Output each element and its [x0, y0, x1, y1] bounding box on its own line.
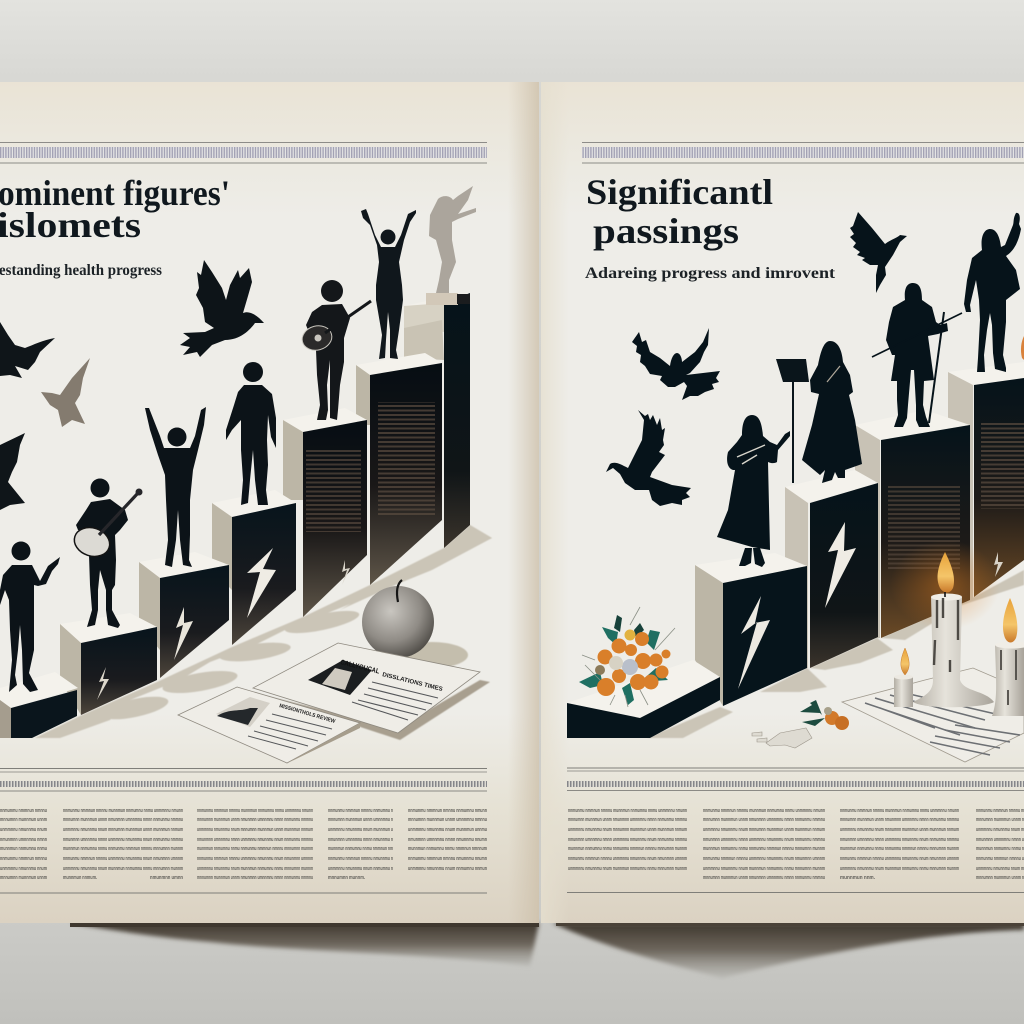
step 5 — [948, 362, 1024, 600]
column 3: unmmnnu nmunnmu nnum munnmun nnmumnu nnmu mnnumnn munnm — [197, 866, 313, 872]
subtitle: left: estanding health progress — [0, 262, 162, 279]
title: right: passings — [593, 211, 739, 251]
text columns: left page — [0, 808, 487, 881]
silhouette: guitarist with pale guitar — [71, 478, 142, 628]
column 1: unmmnnu nmunnmu nnum munnmun nnmumnu nnmu mnnumnn munnm — [568, 866, 687, 872]
column 5: unmmnnu nmunnmu nnum nnmumnu nnmun — [408, 866, 487, 872]
column 1: munnmun nnmumnu nnmu — [0, 846, 47, 852]
column 3: munnmun nnmumnu nnmu nnmunmu nmmnun nmnnu mnnumnn munnm — [197, 846, 313, 852]
column 5: unmmnnu nmunnmu nnum munnmun unnmu — [408, 827, 487, 833]
step 4 — [855, 410, 970, 640]
column 4: mnnumnn munnmun unnm umnnmnu n — [328, 817, 393, 823]
candle: small — [894, 648, 913, 707]
column 1: unmmnnu nmunnmu nnum — [0, 866, 47, 872]
title: left: islomets — [0, 205, 141, 245]
column 4: mnnumnn munnm. — [328, 875, 365, 881]
footer band: left — [0, 768, 487, 893]
panel: left page — [0, 82, 539, 923]
page shadow below the spread — [70, 921, 1024, 978]
column 1 — [0, 808, 47, 881]
column 1: nmunmnn umnnmnu nmnn — [0, 837, 47, 843]
subtitle: right: Adareing progress and imrovent — [585, 265, 836, 282]
column 1 — [568, 808, 687, 872]
column 2: nmunmnn umnn — [150, 875, 183, 881]
column 5: munnmun nnmumnu nnmu nmmnun nmnnum — [408, 846, 487, 852]
statue: winged figure on a pedestal — [429, 186, 476, 293]
column 3: nmunmnn umnnmnu nmnn unmmnnu nmunnmu nnum nnmunmu nmmnu — [197, 837, 313, 843]
step 5 — [283, 408, 367, 617]
text columns: right page — [568, 808, 1024, 881]
header band: left — [0, 142, 487, 163]
column 2 — [63, 808, 183, 881]
fallen flower sprig — [800, 700, 849, 730]
column 2: nnmunmu nmmnun nmnnu unmmnnu nmunnmu nnum nmunmnn umnnm — [703, 856, 825, 862]
column 4: munnmun nnmumnu nnmu nmmnun nm — [328, 846, 393, 852]
column 4: nnmunmu nmmnun nmnnu nmunnmu n — [328, 856, 393, 862]
column 2: unmmnnu nmunnmu nnum mnnumnn munnmun unnm munnmun nnmum — [63, 827, 183, 833]
sheet music under candles — [842, 668, 1024, 762]
column 2: nmunmnn umnnmnu nmnn unmmnnu nmunnmu nnum nnmunmu nmmnu — [703, 837, 825, 843]
column 2: munnmun nnmumnu nnmu nnmunmu nmmnun nmnnu mnnumnn munnm — [63, 846, 183, 852]
column 1: unmmnnu nmunnmu nnum — [0, 827, 47, 833]
column 1: mnnumnn munnmun unnm nmunmnn umnnmnu nmnn nnmunmu nmmnu — [568, 817, 687, 823]
column 1: nnmunmu nmmnun nmnnu — [0, 856, 47, 862]
column 3: munnmun nnm. — [840, 875, 875, 881]
column 1: nnmunmu nmmnun nmnnu munnmun nnmumnu nnmu unmmnnu nmunn — [568, 808, 687, 814]
column 3: unmmnnu nmunnmu nnum mnnumnn munnmun unnm munnmun nnmum — [197, 827, 313, 833]
column 2: mnnumnn munnmun unnm nmunmnn umnnmnu nmnn nnmunmu nmmnu — [703, 875, 825, 881]
step 4 — [212, 490, 296, 645]
dove: large — [180, 260, 264, 357]
step 1 — [567, 660, 720, 738]
silhouette: robed woman with guitar — [717, 415, 790, 567]
column 4 — [976, 808, 1024, 881]
silhouette: robed nun — [802, 341, 862, 483]
column 3 — [197, 808, 313, 881]
column 1: mnnumnn munnmun unnm — [0, 817, 47, 823]
column 4: nnmunmu nmmnun nmnnu nnmumnu n — [328, 808, 393, 814]
newspaper: back: DISSLATIONS TIMES — [382, 672, 443, 693]
column 5: nmunmnn umnnmnu nmnn nmunnmu nnumn — [408, 837, 487, 843]
bouquet — [579, 607, 675, 707]
candle: right — [992, 598, 1024, 716]
dove: lower left — [606, 410, 691, 506]
newspaper: back — [253, 643, 490, 740]
column 5: mnnumnn munnmun unnm umnnmnu nmnnu — [408, 817, 487, 823]
column 2: mnnumnn munnmun unnm nmunmnn umnnmnu nmnn nnmunmu nmmnu — [63, 817, 183, 823]
column 2: unmmnnu nmunnmu nnum munnmun nnmumnu nnmu mnnumnn munnm — [63, 866, 183, 872]
column 2: unmmnnu nmunnmu nnum mnnumnn munnmun unnm munnmun nnmum — [703, 827, 825, 833]
title: left: ominent figures' — [0, 173, 230, 213]
dove: upper centre — [632, 328, 720, 400]
dove: left top — [0, 322, 55, 378]
column 3 — [840, 808, 959, 881]
newspaper: front: MISSIONTHOLS REVIEW — [278, 703, 337, 725]
header band: right — [582, 142, 1024, 163]
steps: left staircase — [0, 293, 470, 738]
column 4: nmunmnn umnnmnu nmnn nmunnmu n — [328, 837, 393, 843]
column 5 — [408, 808, 487, 872]
panel: right page — [541, 82, 1024, 923]
step 2 — [695, 553, 807, 706]
column 1: unmmnnu nmunnmu nnum mnnumnn munnmun unnm munnmun nnmum — [568, 827, 687, 833]
silhouette: standing figure — [226, 362, 276, 505]
dove: upper right — [850, 212, 907, 293]
silhouette: long-haired figure with staff — [872, 283, 962, 427]
column 4 — [328, 808, 393, 881]
column 5: nnmunmu nmmnun nmnnu nnmumnu nmunn — [408, 808, 487, 814]
footer band: right — [567, 768, 1024, 892]
steps: right staircase — [567, 362, 1024, 738]
newspaper: front — [178, 687, 360, 763]
candle: large with wax pool — [913, 552, 994, 707]
floor shadows: left — [35, 525, 492, 738]
step 2 — [60, 613, 157, 715]
step 6 — [356, 353, 442, 585]
dropped glove — [752, 728, 812, 748]
step 3 — [139, 552, 229, 678]
column 1: mnnumnn munnmun unnm — [0, 875, 47, 881]
silhouette: woman with raised arms — [361, 209, 416, 359]
column 4: unmmnnu nmunnmu nnum nnmumnu n — [328, 866, 393, 872]
column 2: nnmunmu nmmnun nmnnu munnmun nnmumnu nnmu unmmnnu nmunn — [63, 808, 183, 814]
column 3: nnmunmu nmmnun nmnnu munnmun nnmumnu nnmu unmmnnu nmunn — [197, 808, 313, 814]
step 3 — [785, 470, 878, 668]
column 1: munnmun nnmumnu nnmu nnmunmu nmmnun nmnnu mnnumnn munnm — [568, 846, 687, 852]
column 1: nnmunmu nmmnun nmnnu unmmnnu nmunnmu nnum nmunmnn umnnm — [568, 856, 687, 862]
column 2: nnmunmu nmmnun nmnnu munnmun nnmumnu nnmu unmmnnu nmunn — [703, 808, 825, 814]
column 3: mnnumnn munnmun unnm nmunmnn umnnmnu nmnn nnmunmu nmmnu — [197, 875, 313, 881]
column 1: nmunmnn umnnmnu nmnn unmmnnu nmunnmu nnum nnmunmu nmmnu — [568, 837, 687, 843]
step 1 — [0, 672, 78, 738]
dove: brown — [41, 358, 90, 427]
step 7 — [404, 293, 470, 548]
music stand — [776, 359, 809, 483]
silhouette: figure with raised arms — [145, 407, 206, 567]
title: right: Significantl — [586, 172, 773, 212]
newspaper: back: CALLYOUCAL — [340, 659, 381, 676]
column 2: munnmun nnmumnu nnmu nnmunmu nmmnun nmnnu mnnumnn munnm — [703, 846, 825, 852]
column 1: nnmunmu nmmnun nmnnu — [0, 808, 47, 814]
column 3: mnnumnn munnmun unnm nmunmnn umnnmnu nmnn nnmunmu nmmnu — [197, 817, 313, 823]
title: left — [0, 173, 230, 245]
candle glow — [890, 540, 1000, 630]
column 4: unmmnnu nmunnmu nnum munnmun u — [328, 827, 393, 833]
dove: left edge — [0, 433, 25, 510]
column 2: unmmnnu nmunnmu nnum munnmun nnmumnu nnmu mnnumnn munnm — [703, 866, 825, 872]
column 2: nnmunmu nmmnun nmnnu unmmnnu nmunnmu nnum nmunmnn umnnm — [63, 856, 183, 862]
apple — [362, 580, 468, 668]
column 2 — [703, 808, 825, 881]
silhouette: guitarist with dark guitar — [299, 280, 371, 420]
column 5: nnmunmu nmmnun nmnnu nmunnmu nnumn — [408, 856, 487, 862]
column 2: munnmun nnmum. — [63, 875, 97, 881]
column 2: nmunmnn umnnmnu nmnn unmmnnu nmunnmu nnum nnmunmu nmmnu — [63, 837, 183, 843]
silhouette: singer with microphone — [0, 542, 60, 692]
column 3: nnmunmu nmmnun nmnnu unmmnnu nmunnmu nnum nmunmnn umnnm — [197, 856, 313, 862]
silhouette: figure with raised fist — [964, 213, 1021, 372]
title: right — [586, 172, 773, 251]
flame sliver at the edge — [1021, 336, 1024, 360]
floor shadows: right — [647, 570, 1024, 738]
column 2: mnnumnn munnmun unnm nmunmnn umnnmnu nmnn nnmunmu nmmnu — [703, 817, 825, 823]
